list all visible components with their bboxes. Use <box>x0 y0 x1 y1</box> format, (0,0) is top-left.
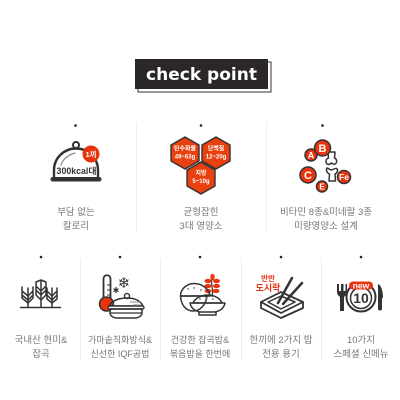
icon: vitamin circles and bone: Fe <box>339 172 349 182</box>
caption: low calorie: 칼로리 <box>63 221 89 232</box>
icon: rice bowls and grain <box>180 274 225 315</box>
icon: cloche <box>51 142 101 181</box>
caption: three nutrients: 균형잡힌 <box>184 206 218 218</box>
icon: nutrient hexagons: 탄수화물 <box>174 144 197 152</box>
panel: ten menus <box>333 256 389 360</box>
icon: cloche: 1끼 <box>85 149 97 159</box>
caption: dual container: 한끼에 2가지 밥 <box>249 335 313 346</box>
caption: domestic grain: 잡곡 <box>32 348 50 360</box>
icon: plate with cutlery <box>337 280 383 312</box>
caption: low calorie: 부담 없는 <box>57 206 95 218</box>
icon: cloche: 300kcal대 <box>57 165 96 176</box>
icon: lunch box and chopsticks: 반반 <box>261 273 275 283</box>
icon: lunch box and chopsticks <box>256 273 303 318</box>
caption: ten menus: 10가지 <box>347 335 375 346</box>
icon: thermometer and pot: ✱ <box>113 286 120 295</box>
icon: plate with cutlery: new <box>353 280 370 290</box>
icon: nutrient hexagons: 지방 <box>195 169 207 177</box>
panel: dual container <box>249 256 313 360</box>
caption: three nutrients: 3대 영양소 <box>180 221 223 232</box>
icon: lunch box and chopsticks: 도시락 <box>256 282 281 293</box>
caption: grain and fried rice: 건강한 잡곡밥& <box>171 334 229 345</box>
title: check point: check point <box>146 65 257 85</box>
icon: nutrient hexagons: 49~63g <box>175 154 196 160</box>
title: check point <box>135 59 271 92</box>
panel: domestic grain <box>15 256 68 360</box>
caption: IQF process: 신선한 IQF공법 <box>91 349 149 359</box>
panel: grain and fried rice <box>170 256 230 359</box>
caption: grain and fried rice: 볶음밥을 한번에 <box>170 349 230 359</box>
icon: vitamin circles and bone: E <box>319 182 325 192</box>
icon: vitamin circles and bone: A <box>308 150 315 160</box>
caption: IQF process: 가마솥직화방식& <box>88 335 152 345</box>
panel: IQF process <box>88 256 152 359</box>
icon: wheat <box>20 280 60 308</box>
icon: nutrient hexagons <box>171 137 230 194</box>
icon: nutrient hexagons: 12~20g <box>206 154 227 160</box>
panel: low calorie <box>51 124 101 232</box>
icon: plate with cutlery: 10 <box>353 290 369 306</box>
caption: dual container: 전용 용기 <box>262 349 300 360</box>
panel: vitamins and minerals <box>280 124 372 232</box>
icon: thermometer and pot <box>100 274 144 318</box>
icon: thermometer and pot: ❄ <box>118 274 130 292</box>
icon: nutrient hexagons: 단백질 <box>208 144 224 152</box>
icon: vitamin circles and bone: B <box>319 143 327 155</box>
icon: vitamin circles and bone: C <box>304 170 312 182</box>
caption: vitamins and minerals: 미량영양소 설계 <box>294 220 358 232</box>
caption: vitamins and minerals: 비타민 8종&미네랄 3종 <box>280 207 372 218</box>
icon: vitamin circles and bone <box>300 140 350 192</box>
icon: nutrient hexagons: 5~10g <box>192 179 210 185</box>
caption: domestic grain: 국내산 현미& <box>15 335 68 346</box>
caption: ten menus: 스페셜 신메뉴 <box>333 349 389 360</box>
panel: three nutrients <box>171 124 230 232</box>
